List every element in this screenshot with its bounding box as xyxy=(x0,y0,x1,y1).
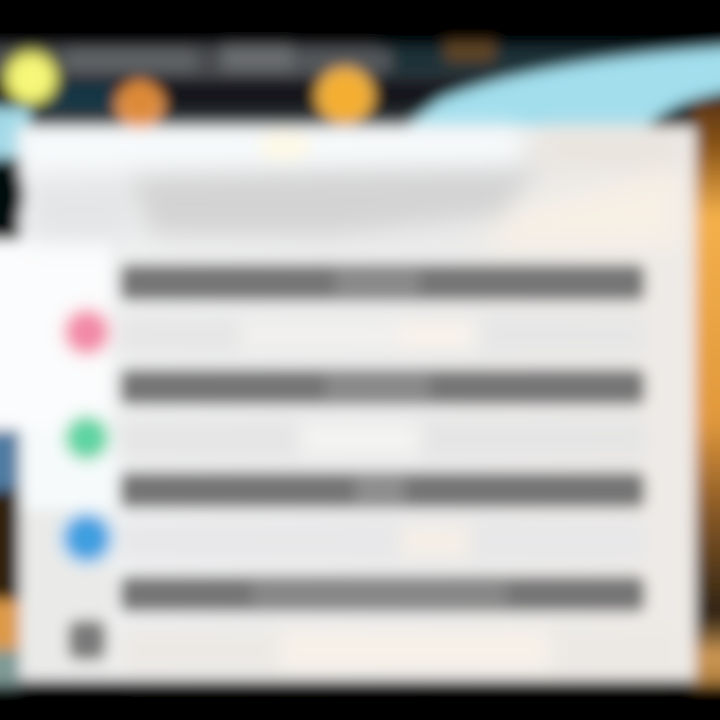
icon: yellow dot xyxy=(4,51,58,105)
row 3 body xyxy=(120,523,645,559)
icon: orange dot xyxy=(116,80,164,129)
panel left white column xyxy=(0,240,115,675)
row 3 xyxy=(58,472,645,567)
row 1 xyxy=(60,264,645,359)
row 2 xyxy=(61,369,645,464)
row 3 bar xyxy=(120,472,645,508)
row 4 body xyxy=(120,627,680,675)
row 1 bar xyxy=(120,264,645,301)
row 2 icon xyxy=(61,412,113,464)
icon: amber dot xyxy=(316,67,374,125)
header title text xyxy=(66,42,495,70)
row 1 body xyxy=(120,316,645,354)
left edge stripes xyxy=(0,108,30,685)
row 1 icon xyxy=(60,305,114,359)
right side glow xyxy=(692,100,720,685)
black badge xyxy=(0,159,24,231)
row 4 xyxy=(68,576,680,675)
panel heading area xyxy=(20,128,680,248)
row 2 bar xyxy=(120,369,645,405)
row 4 bar xyxy=(120,576,645,612)
top light spot xyxy=(259,131,311,161)
header swoosh xyxy=(395,46,720,135)
row 3 icon xyxy=(58,509,116,567)
row 4 icon xyxy=(68,620,106,660)
main panel xyxy=(20,127,695,680)
header band xyxy=(0,46,720,128)
row 2 body xyxy=(120,420,645,458)
